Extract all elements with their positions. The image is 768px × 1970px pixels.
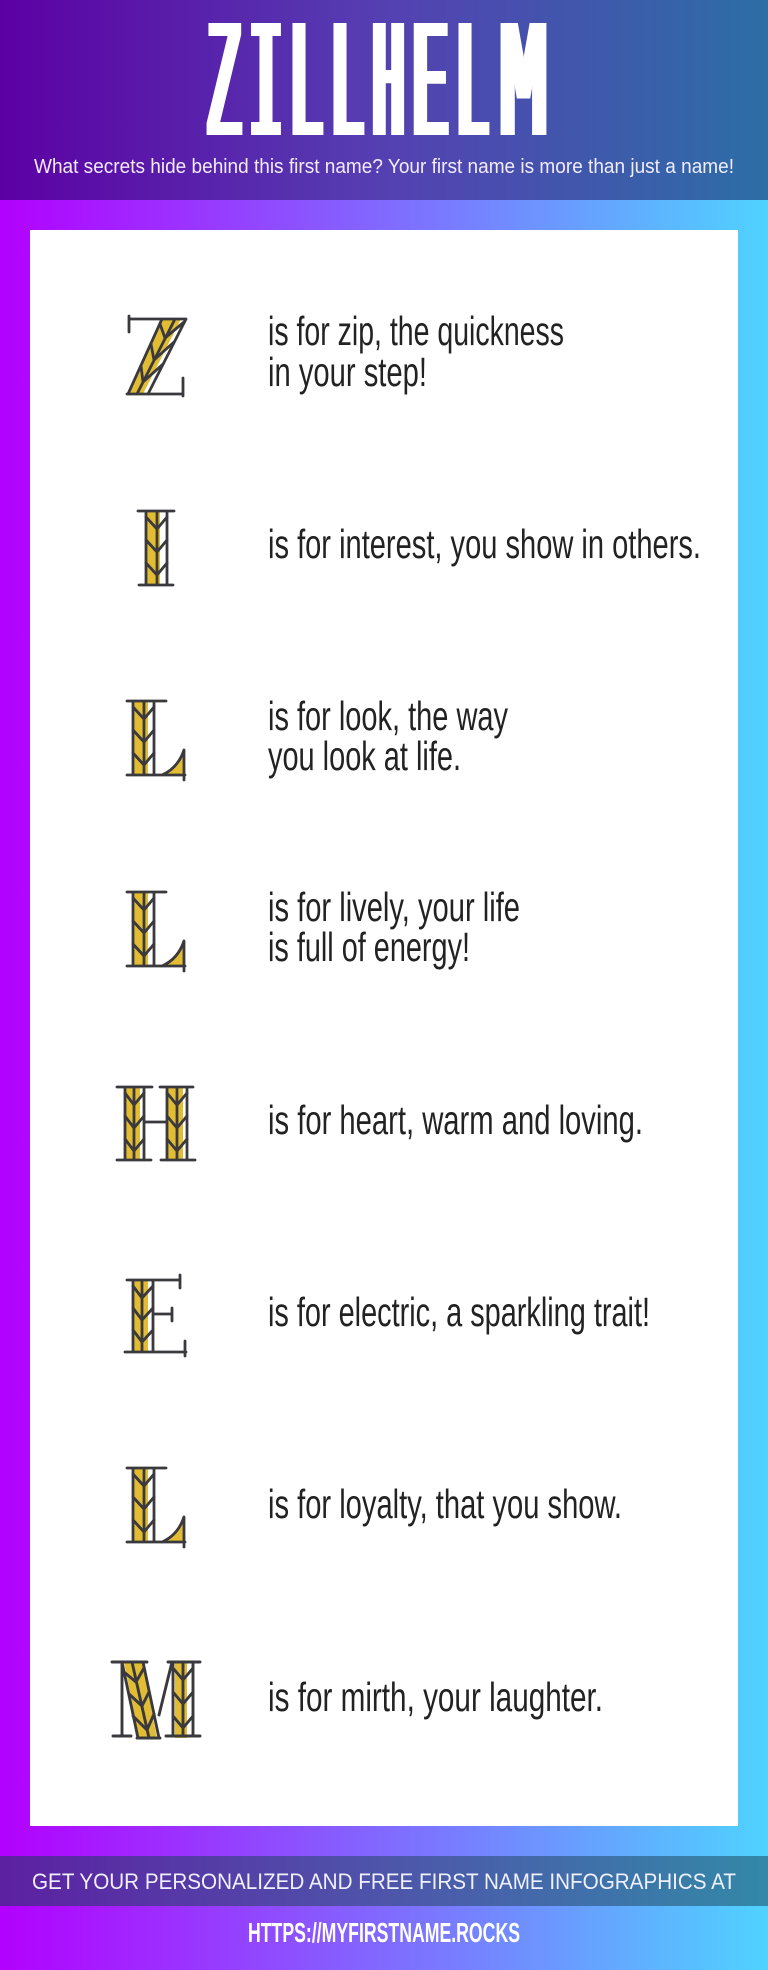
row: Z — [127, 308, 564, 396]
row: M — [112, 1662, 603, 1738]
footer url: HTTPS://MYFIRSTNAME.ROCKS — [248, 1917, 520, 1948]
text: Z line: in your step! — [268, 349, 427, 395]
icon: wheat letter M — [112, 1662, 200, 1738]
row: I — [138, 511, 701, 585]
text: Z line: is for zip, the quickness — [268, 308, 564, 354]
footer band — [0, 1856, 768, 1906]
subtitle: What secrets hide behind this first name? Your first name is more than just a name! — [34, 156, 734, 178]
icon: wheat letter H — [117, 1087, 195, 1160]
title: ZILLHELM — [209, 0, 547, 187]
icon: wheat letter E — [125, 1275, 186, 1356]
text: L loyalty: is for loyalty, that you show. — [268, 1481, 622, 1527]
icon: wheat letter L — [127, 1468, 185, 1547]
text: L look: is for look, the way — [268, 693, 508, 739]
icon: wheat letter L — [127, 701, 185, 780]
text: L look — [268, 693, 508, 779]
title: ZILLHELM: E — [413, 0, 448, 187]
icon: wheat letter Z — [127, 316, 186, 396]
text: M line: is for mirth, your laughter. — [268, 1674, 603, 1720]
row: L lively — [127, 884, 520, 971]
row: L loyalty — [127, 1468, 622, 1547]
text: Z line — [268, 308, 564, 395]
icon: wheat letter L — [127, 892, 185, 971]
white content panel — [30, 230, 738, 1826]
text: L lively: is full of energy! — [268, 924, 470, 970]
icon: wheat letter I — [138, 511, 174, 585]
text: L lively: is for lively, your life — [268, 884, 520, 930]
header band — [0, 0, 768, 200]
row: L look — [127, 693, 508, 780]
row: E — [125, 1275, 650, 1356]
footer call to action: GET YOUR PERSONALIZED AND FREE FIRST NAME INFOGRAPHICS AT — [32, 1869, 736, 1894]
row: H — [117, 1087, 643, 1160]
text: L look: you look at life. — [268, 733, 461, 779]
text: L lively — [268, 884, 520, 970]
